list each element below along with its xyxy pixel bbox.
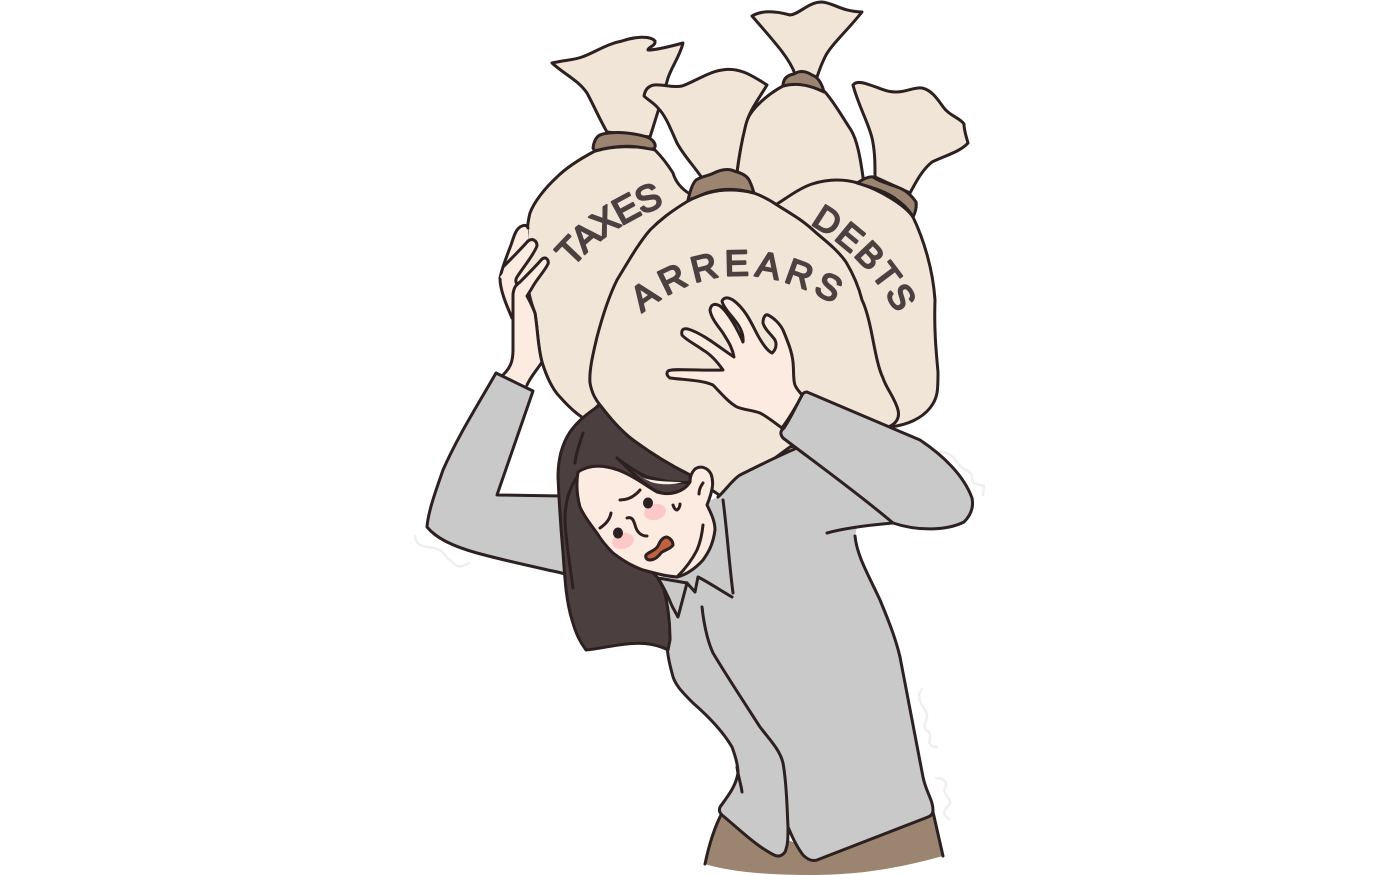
shirt creases bbox=[702, 607, 788, 827]
label: ARREARS: ARREARS bbox=[634, 250, 842, 314]
icon: stress wiggle lines bbox=[415, 452, 984, 819]
ear line bbox=[699, 483, 703, 494]
jaw line bbox=[677, 525, 703, 577]
eyes bbox=[643, 498, 653, 508]
label: DEBTS: DEBTS bbox=[812, 204, 915, 310]
collar bbox=[658, 577, 732, 617]
sleeve: right arm bbox=[781, 392, 973, 529]
sweat mark bbox=[673, 504, 680, 510]
hand: right, on arrears bag bbox=[667, 298, 802, 428]
hair strands over forehead bbox=[617, 458, 690, 494]
nose bbox=[627, 518, 647, 536]
sleeve: left arm bbox=[427, 373, 566, 574]
hand: left, supporting taxes bag bbox=[500, 225, 548, 385]
pants bbox=[705, 812, 943, 875]
eyebrows bbox=[620, 490, 640, 500]
bag: debts bbox=[776, 80, 970, 428]
mouth bbox=[646, 537, 673, 560]
bag: taxes bbox=[526, 36, 689, 418]
bag: arrears bbox=[588, 68, 900, 496]
blush bbox=[642, 501, 668, 523]
bag: back centre bbox=[700, 2, 866, 240]
label: TAXES: TAXES bbox=[553, 184, 662, 262]
face bbox=[577, 458, 715, 577]
torso: shirt bbox=[660, 448, 933, 861]
hair bbox=[558, 405, 690, 650]
